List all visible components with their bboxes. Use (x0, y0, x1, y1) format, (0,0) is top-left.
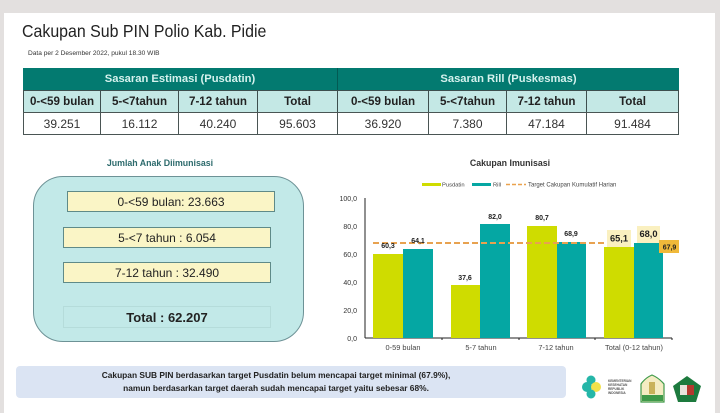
column header: 7-12 tahun: 7-12 tahun (189, 95, 247, 108)
panel: immunized children (33, 176, 304, 342)
value: 95.603 (257, 112, 338, 135)
bars: Pusdatin (373, 226, 634, 338)
coverage targets table (23, 68, 679, 135)
value: 16.112: 16.112 (122, 116, 157, 130)
icon: ministry of health logo: INDONESIA (608, 391, 626, 395)
column header: Total (257, 90, 338, 113)
legend: Rill (493, 182, 501, 188)
count: 5-<7 tahun (63, 227, 271, 248)
coverage bar chart (339, 182, 679, 352)
column header: Total rill: Total (619, 95, 646, 108)
column header: 0-<59 bulan (23, 90, 101, 113)
count: 7-12 tahun (63, 262, 271, 283)
icon: ministry of health logo (582, 376, 632, 398)
value: 95.603: 95.603 (279, 116, 316, 130)
conclusion callout: namun berdasarkan target daerah sudah mencapai target yaitu sebesar 68%. (123, 383, 429, 393)
header: Sasaran Rill: Sasaran Rill (Puskesmas) (440, 73, 577, 85)
column header: 0-<59 bulan rill: 0-<59 bulan (351, 95, 415, 108)
bar value labels: 37,6 (458, 275, 472, 282)
bar value labels: 60,3 (381, 243, 395, 250)
icon: ministry of health logo: REPUBLIK (608, 387, 625, 391)
bar value labels: 82,0 (488, 214, 502, 221)
conclusion callout: Cakupan SUB PIN berdasarkan target Pusdatin belum mencapai target minimal (67.9%), (102, 370, 450, 380)
bar value labels: 80,7 (535, 215, 549, 222)
total value callouts: 67,9 (663, 244, 676, 252)
column header: 7-12 tahun (178, 90, 258, 113)
value: 47.184 (506, 112, 587, 135)
icon: ministry of health logo: KESEHATAN (608, 383, 628, 387)
value: 91.484: 91.484 (614, 116, 651, 130)
column header: 5-<7tahun rill: 5-<7tahun (440, 95, 495, 108)
legend: Pusdatin (442, 182, 465, 188)
icon: ministry of health logo: KEMENTERIAN (608, 379, 632, 383)
title: Cakupan Sub PIN Polio Kab. Pidie (22, 21, 266, 41)
heading: Jumlah Anak Diimunisasi: Jumlah Anak Diimunisasi (107, 158, 213, 168)
total count (63, 306, 271, 328)
value: 36.920: 36.920 (365, 116, 401, 130)
value: 36.920 (337, 112, 429, 135)
bar value labels: 64,1 (411, 238, 425, 245)
header: Sasaran Estimasi: Sasaran Estimasi (Pusdatin) (105, 73, 255, 85)
column header: 7-12 tahun rill (506, 90, 587, 113)
header: Sasaran Rill (337, 68, 679, 90)
header: Sasaran Estimasi (23, 68, 337, 90)
heading: Cakupan Imunisasi: Cakupan Imunisasi (470, 158, 550, 168)
conclusion callout (16, 366, 566, 398)
value: 39.251 (23, 112, 101, 135)
value: 39.251: 39.251 (44, 116, 80, 130)
column header: 5-<7tahun (100, 90, 179, 113)
column header: 0-<59 bulan rill (337, 90, 429, 113)
x axis (365, 338, 672, 352)
y axis: 80,0 (343, 224, 357, 231)
count: 0-<59 bulan: 0-<59 bulan: 23.663 (117, 194, 225, 208)
legend (422, 182, 616, 188)
value: 7.380: 7.380 (452, 116, 483, 130)
y axis: 60,0 (343, 252, 357, 259)
x axis: 7-12 tahun (538, 343, 574, 352)
y axis: 40,0 (343, 280, 357, 287)
total count: Total : 62.207 (126, 310, 208, 324)
total value callouts: 68,0 (639, 229, 658, 239)
value: 40.240: 40.240 (200, 116, 236, 130)
icon: Pidie crest (673, 376, 701, 402)
column header: Total rill (586, 90, 679, 113)
column header: 7-12 tahun rill: 7-12 tahun (518, 95, 575, 108)
bar value labels: 68,9 (564, 231, 578, 238)
y axis: 100,0 (339, 196, 357, 203)
x axis: 5-7 tahun (465, 343, 497, 352)
data date note: Data per 2 Desember 2022, pukul 18.30 WIB (28, 50, 160, 57)
count: 5-<7 tahun: 5-<7 tahun : 6.054 (118, 230, 216, 244)
value: 16.112 (100, 112, 179, 135)
y axis (339, 196, 365, 343)
legend: Target Cakupan Kumulatif Harian (528, 182, 616, 188)
value: 47.184: 47.184 (528, 116, 565, 130)
bar value labels (381, 214, 578, 282)
column header: 0-<59 bulan: 0-<59 bulan (30, 95, 94, 108)
column header: 5-<7tahun: 5-<7tahun (112, 95, 167, 108)
icon: Aceh crest (641, 375, 664, 402)
column header: 5-<7tahun rill (428, 90, 507, 113)
value: 7.380 (428, 112, 507, 135)
count: 7-12 tahun: 7-12 tahun : 32.490 (115, 266, 219, 280)
target line (373, 242, 604, 244)
count: 0-<59 bulan (67, 191, 275, 212)
column header: Total: Total (284, 95, 311, 108)
x axis: Total (0-12 tahun) (605, 343, 663, 352)
y axis: 20,0 (343, 308, 357, 315)
x axis: 0-59 bulan (386, 343, 420, 352)
value: 91.484 (586, 112, 679, 135)
logos (582, 374, 701, 403)
y axis: 0,0 (347, 336, 357, 343)
value: 40.240 (178, 112, 258, 135)
bars: Rill (403, 224, 663, 338)
total value callouts: 65,1 (610, 234, 628, 244)
total value callouts (607, 226, 679, 253)
